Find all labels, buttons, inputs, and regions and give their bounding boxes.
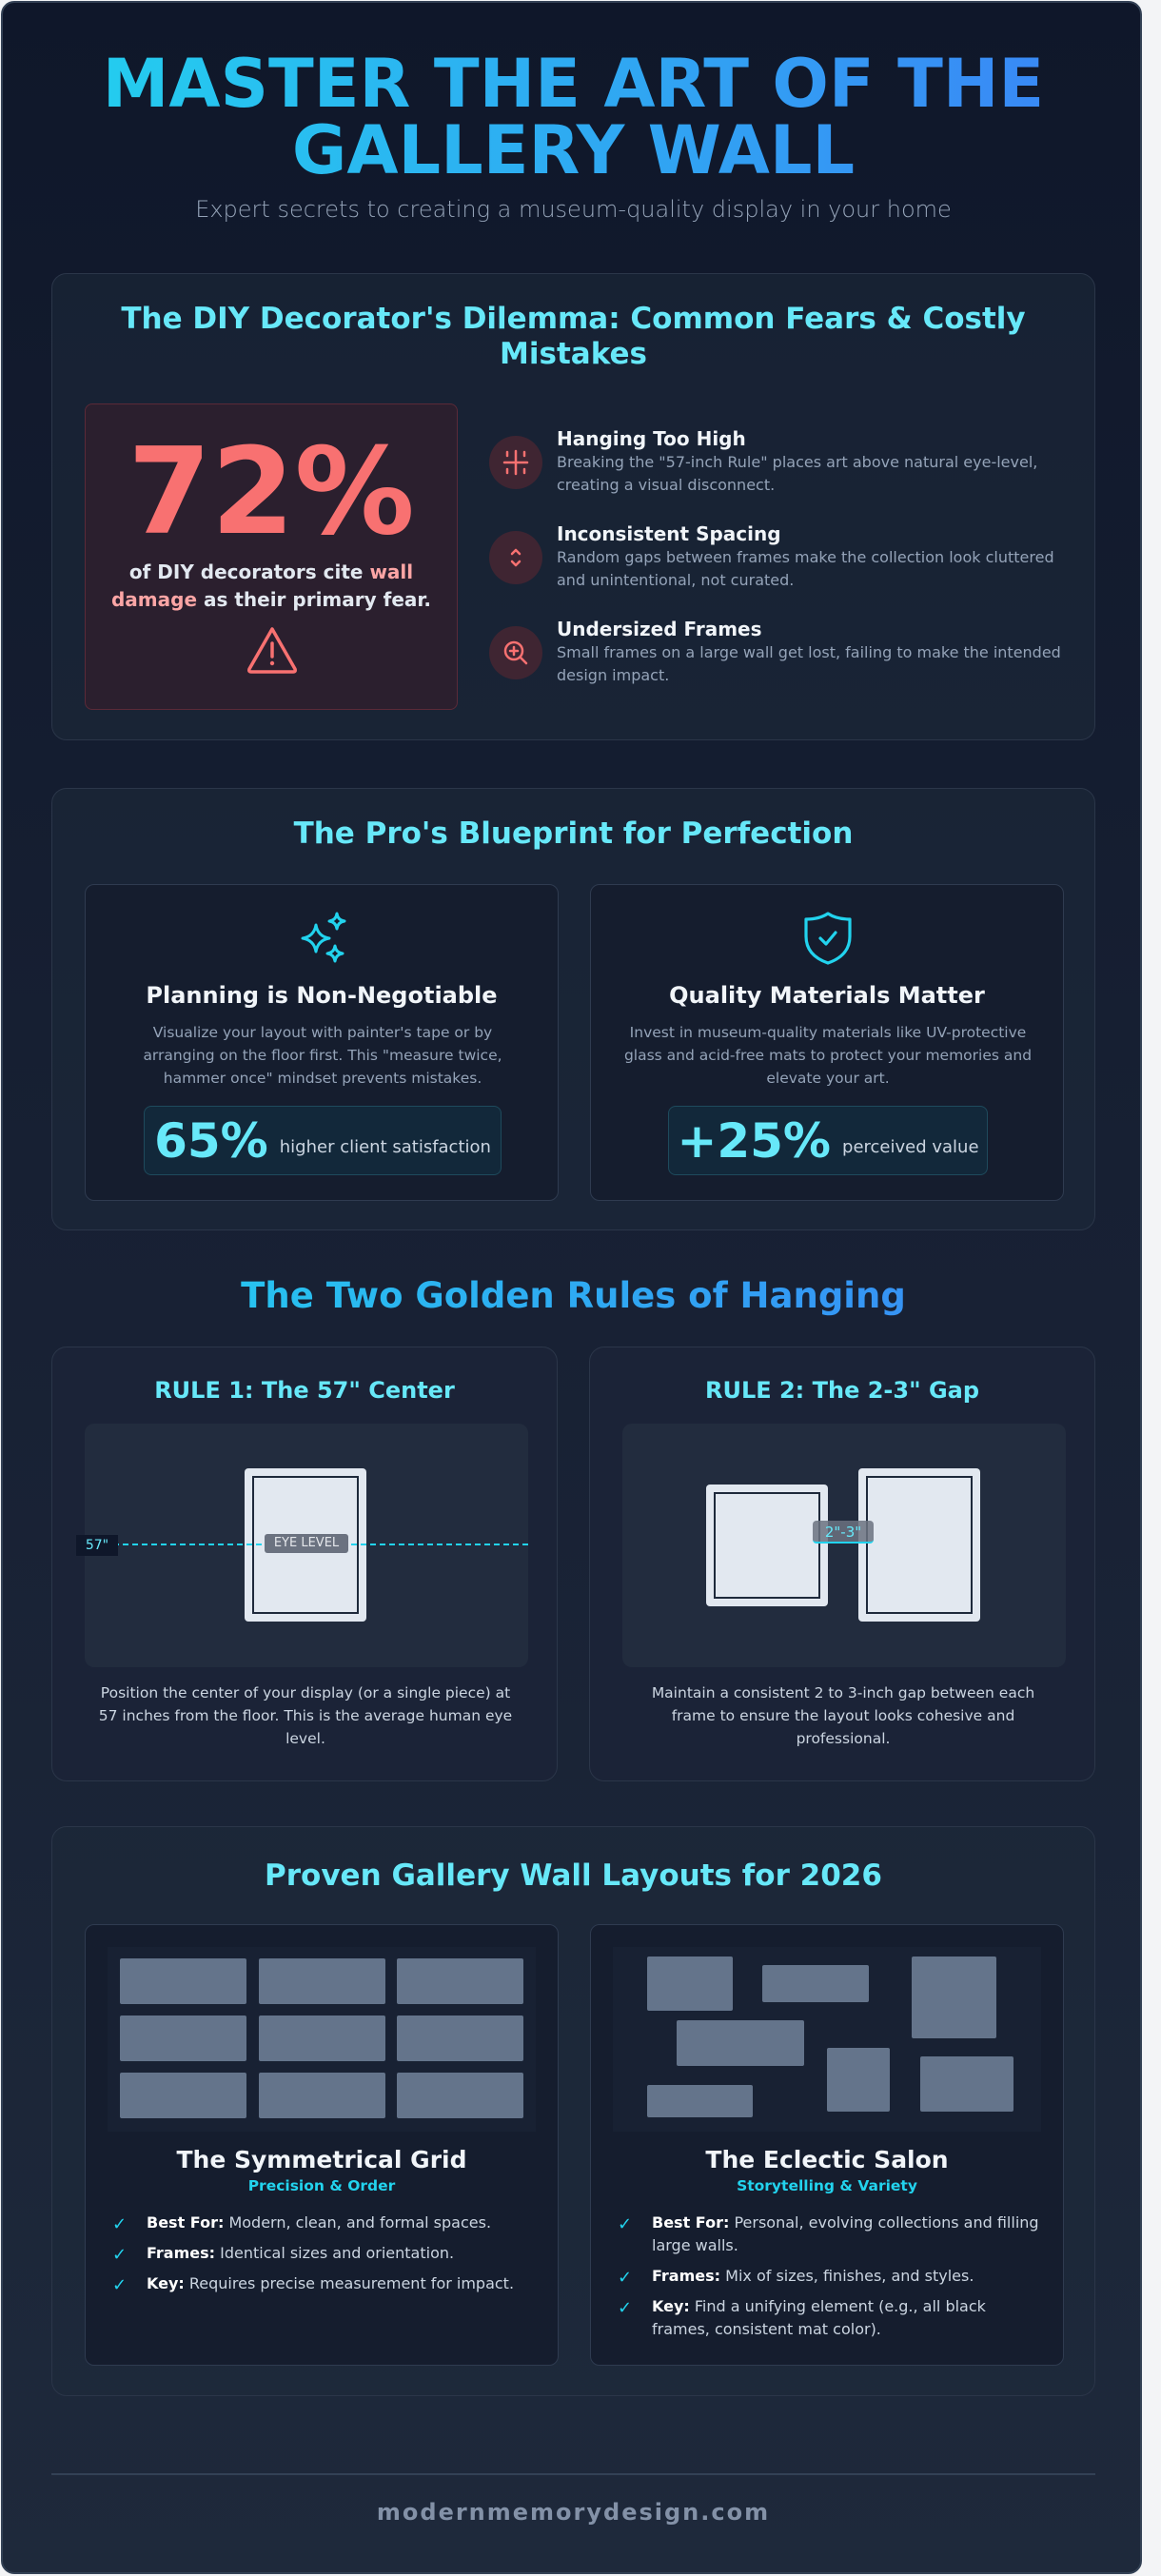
icon: warning: [247, 627, 297, 674]
left frame: [706, 1485, 828, 1606]
panel: rule 1: [51, 1347, 558, 1781]
card: eclectic salon: [590, 1924, 1064, 2366]
icon: spacing: [489, 531, 542, 584]
checklist: [620, 2213, 1039, 2338]
card title: Quality Materials Matter: [669, 982, 985, 1009]
card: symmetrical grid: [85, 1924, 559, 2366]
gap label: 2"-3": [825, 1524, 861, 1541]
heading: dilemma: The DIY Decorator's Dilemma: Common Fears & Costly: [121, 302, 1026, 336]
icon: shield: [804, 912, 852, 965]
stat: +25%: perceived value: [842, 1137, 979, 1157]
checklist: Key: Find a unifying element (e.g., all black frames, consistent mat color).: [652, 2297, 986, 2338]
heading: layouts: Proven Gallery Wall Layouts for 2026: [265, 1858, 882, 1893]
layout subtitle: Precision & Order: [248, 2177, 395, 2194]
rule title: RULE 2: The 2-3" Gap: [705, 1377, 979, 1404]
rule text: Maintain a consistent 2 to 3-inch gap between each frame to ensure the layout looks cohesive and professional.: [652, 1684, 1034, 1747]
mistake: undersized frames: Undersized Frames: [557, 618, 762, 640]
stat: 65%: higher client satisfaction: [280, 1137, 491, 1157]
checklist: Best For: Modern, clean, and formal spaces.: [147, 2213, 491, 2232]
stat: 65%: [144, 1106, 502, 1175]
stat box: 72%: [85, 403, 458, 710]
57" label: [76, 1535, 118, 1556]
card: planning: [85, 884, 559, 1201]
checklist: Frames: Mix of sizes, finishes, and styles.: [652, 2267, 974, 2285]
title: [3, 50, 1144, 184]
checklist: Frames: Identical sizes and orientation.: [147, 2244, 454, 2262]
card text: Invest in museum-quality materials like UV-protective glass and acid-free mats to protect your memories and elevate your art.: [624, 1024, 1032, 1087]
mistake: undersized frames: Small frames on a large wall get lost, failing to make the intended design impact.: [557, 643, 1061, 684]
rule text: Position the center of your display (or a single piece) at 57 inches from the floor. This is the average human eye level.: [99, 1684, 512, 1747]
footer: modernmemorydesign.com: [377, 2499, 770, 2526]
eye level label: EYE LEVEL: [274, 1536, 339, 1550]
title: GALLERY WALL: [292, 111, 855, 189]
salon illustration: [613, 1947, 1041, 2132]
heading: blueprint: The Pro's Blueprint for Perfection: [294, 816, 853, 851]
right frame: [858, 1468, 980, 1622]
panel: layouts: [51, 1826, 1095, 2396]
layout subtitle: Storytelling & Variety: [737, 2177, 917, 2194]
stat: 65%: 65%: [154, 1113, 268, 1169]
diagram: gap: [622, 1424, 1066, 1667]
panel: rule 2: [589, 1347, 1095, 1781]
layout title: The Eclectic Salon: [705, 2146, 949, 2173]
mistake: undersized frames: [557, 618, 1061, 684]
mistake: hanging too high: [557, 427, 1037, 494]
mistake: inconsistent spacing: [557, 522, 1054, 589]
rule title: RULE 1: The 57" Center: [154, 1377, 455, 1404]
card text: Visualize your layout with painter's tape or by arranging on the floor first. This "measure twice, hammer once" mindset prevents mistakes.: [143, 1024, 502, 1087]
diagram: eye level: [85, 1424, 528, 1667]
heading: dilemma: Mistakes: [500, 337, 647, 371]
stat: +25%: +25%: [677, 1113, 831, 1169]
checklist: Best For: Personal, evolving collections and filling large walls.: [652, 2213, 1039, 2254]
gap label: [813, 1521, 874, 1544]
heading: golden rules: [3, 1275, 1144, 1316]
heading: dilemma: [121, 302, 1026, 371]
big number: 72%: [128, 422, 415, 561]
mistake: hanging too high: Breaking the "57-inch Rule" places art above natural eye-level, creating a visual disconnect.: [557, 453, 1037, 494]
frame: [245, 1468, 366, 1622]
panel: common fears: [51, 273, 1095, 740]
stat: +25%: [668, 1106, 988, 1175]
eye level label: [265, 1534, 348, 1553]
checklist: [114, 2213, 514, 2292]
icon: sparkles: [301, 912, 346, 963]
57" label: 57": [86, 1538, 108, 1553]
mistake: hanging too high: Hanging Too High: [557, 427, 746, 450]
mistake: inconsistent spacing: Random gaps between frames make the collection look cluttered and unintentional, not curated.: [557, 548, 1054, 589]
layout title: The Symmetrical Grid: [177, 2146, 466, 2173]
dashed eye-level line: [85, 1544, 528, 1545]
icon: hanging too high: [489, 436, 542, 489]
card: quality: [590, 884, 1064, 1201]
icon: zoom: [489, 626, 542, 679]
grid illustration: [108, 1947, 536, 2132]
subtitle: Expert secrets to creating a museum-quality display in your home: [195, 196, 952, 223]
panel: pro's blueprint: [51, 788, 1095, 1230]
card title: Planning is Non-Negotiable: [146, 982, 498, 1009]
title: MASTER THE ART OF THE: [103, 45, 1044, 123]
checklist: Key: Requires precise measurement for impact.: [147, 2274, 514, 2292]
stat text: of DIY decorators cite wall damage as their primary fear.: [111, 560, 431, 611]
mistake: inconsistent spacing: Inconsistent Spacing: [557, 522, 781, 545]
